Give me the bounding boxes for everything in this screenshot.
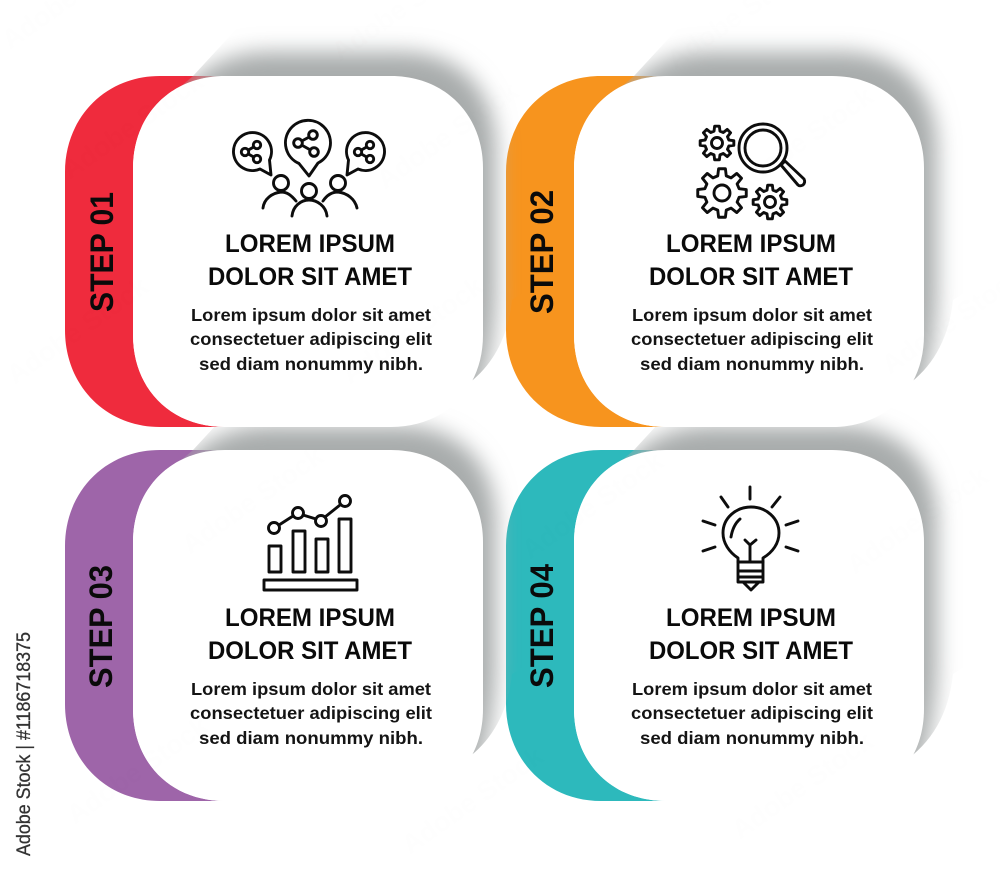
watermark: Adobe Stock [371, 75, 524, 195]
body text: step 01: consectetuer adipiscing elit [190, 329, 432, 349]
step label: step 02: STEP 02 [524, 190, 560, 314]
heading: step 02 [649, 230, 853, 291]
step label: step 01: STEP 01 [84, 192, 120, 312]
body text: step 03: sed diam nonummy nibh. [199, 728, 423, 748]
heading: step 04: DOLOR SIT AMET [649, 637, 853, 665]
band and shadow: step 03 [65, 426, 496, 801]
band and shadow: step 01 [65, 52, 496, 427]
body text: step 01: sed diam nonummy nibh. [199, 354, 423, 374]
heading: step 03: LOREM IPSUM [225, 604, 395, 632]
heading: step 04 [649, 604, 853, 665]
body text: step 04: sed diam nonummy nibh. [640, 728, 864, 748]
body text: step 01: Lorem ipsum dolor sit amet [191, 305, 431, 325]
watermark: Adobe Stock [396, 740, 549, 860]
watermark: Adobe Stock [1, 270, 154, 390]
band and shadow: step 02 [506, 52, 937, 427]
body text: step 03: Lorem ipsum dolor sit amet [191, 679, 431, 699]
body text: step 03: consectetuer adipiscing elit [190, 703, 432, 723]
body text: step 03 [190, 679, 432, 748]
watermark: Adobe Stock [61, 710, 214, 830]
heading: step 04: LOREM IPSUM [666, 604, 836, 632]
body text: step 04 [631, 679, 873, 748]
heading: step 02: LOREM IPSUM [666, 230, 836, 258]
watermark: Adobe Stock [176, 440, 329, 560]
watermark: Adobe Stock [726, 80, 879, 200]
icon: bar chart with trend line [264, 496, 357, 590]
body text: step 02 [631, 305, 873, 374]
step label: step 04: STEP 04 [524, 564, 560, 688]
body text: step 02: sed diam nonummy nibh. [640, 354, 864, 374]
band and shadow: step 04 [506, 426, 937, 801]
step label: step 03: STEP 03 [83, 565, 119, 688]
heading: step 01 [208, 230, 412, 291]
card: step 04 [506, 426, 937, 801]
body text: step 01 [190, 305, 432, 374]
watermark: Adobe Stock [56, 65, 209, 185]
icon: people sharing in speech bubbles [233, 120, 385, 216]
card: step 03 [65, 426, 496, 801]
body text: step 02: Lorem ipsum dolor sit amet [632, 305, 872, 325]
body text: step 04: Lorem ipsum dolor sit amet [632, 679, 872, 699]
watermark: Adobe Stock [726, 725, 879, 845]
heading: step 02: DOLOR SIT AMET [649, 263, 853, 291]
watermark: Adobe Stock [336, 270, 489, 390]
body text: step 02: consectetuer adipiscing elit [631, 329, 873, 349]
heading: step 03 [208, 604, 412, 665]
heading: step 01: DOLOR SIT AMET [208, 263, 412, 291]
icon: light bulb [703, 487, 798, 590]
card: step 01 [65, 52, 496, 427]
icon: gears and magnifier [698, 124, 805, 219]
side credit text: Adobe Stock | #1186718375 [14, 632, 35, 856]
heading: step 03: DOLOR SIT AMET [208, 637, 412, 665]
body text: step 04: consectetuer adipiscing elit [631, 703, 873, 723]
heading: step 01: LOREM IPSUM [225, 230, 395, 258]
watermark: Adobe Stock [516, 445, 669, 565]
watermark: Adobe Stock [841, 460, 994, 580]
card: step 02 [506, 52, 937, 427]
